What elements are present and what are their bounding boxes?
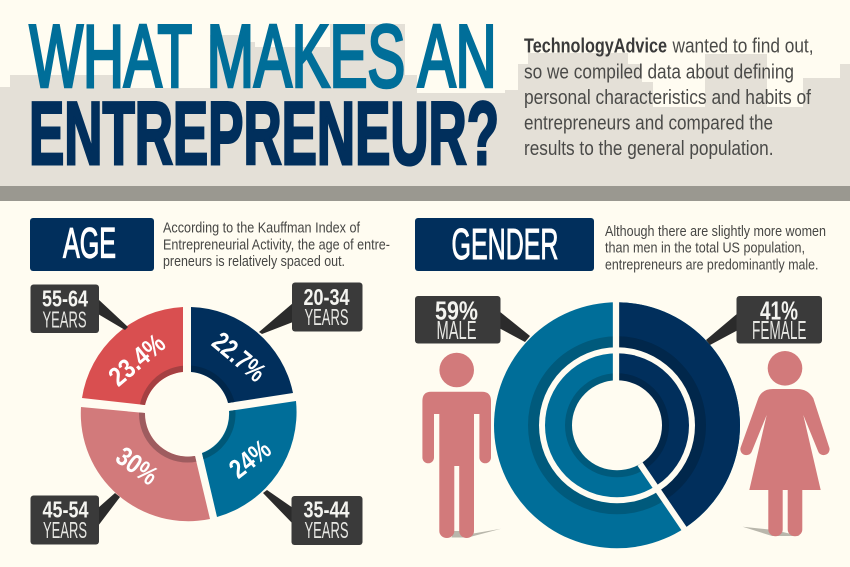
- gender donut chart: [494, 298, 740, 548]
- gender description: [605, 224, 826, 274]
- slice: 35-44 years 24%: 24%: [223, 434, 277, 484]
- gender heading: GENDER: [452, 220, 558, 269]
- slice: 45-54 years 30%: [80, 407, 210, 522]
- callout: 55-64 years: 55-64: [42, 286, 88, 312]
- slice: 45-54 years 30%: 30%: [110, 441, 164, 491]
- female ring 41%: [619, 302, 740, 527]
- gender heading: [415, 218, 594, 271]
- age heading: [30, 218, 154, 271]
- age heading: AGE: [63, 220, 116, 268]
- icon: male figure: [422, 353, 501, 538]
- callout: 41% female: [706, 296, 822, 345]
- intro text block: [524, 35, 814, 160]
- intro text block: wanted to find out,: [672, 35, 814, 57]
- age description: According to the Kauffman Index of: [163, 221, 361, 237]
- intro text block: personal characteristics and habits of: [524, 87, 811, 109]
- callout: 20-34 years: [259, 282, 362, 334]
- callout: 55-64 years: [30, 284, 128, 333]
- callout: 35-44 years: YEARS: [304, 517, 348, 543]
- title: ENTREPRENEUR?: [29, 83, 499, 183]
- header skyline background: [0, 24, 850, 201]
- panel: age: [30, 218, 390, 545]
- panel: gender: [415, 218, 830, 548]
- slice: 55-64 years 23.4%: [82, 307, 183, 405]
- callout: 59% male: MALE: [436, 317, 476, 345]
- callout: 59% male: [415, 296, 530, 345]
- intro text block: results to the general population.: [524, 138, 774, 160]
- callout: 45-54 years: [30, 493, 120, 544]
- age description: preneurs is relatively spaced out.: [163, 254, 345, 270]
- intro text block: entrepreneurs and compared the: [524, 112, 773, 134]
- slice: 20-34 years 22.7%: 22.7%: [206, 326, 272, 388]
- callout: 20-34 years: 20-34: [304, 284, 350, 310]
- age description: Entrepreneurial Activity, the age of entre-: [163, 237, 390, 253]
- callout: 41% female: 41%: [760, 297, 798, 325]
- age donut chart: [81, 307, 297, 521]
- age description: [163, 221, 390, 270]
- callout: 45-54 years: 45-54: [42, 496, 89, 522]
- callout: 59% male: 59%: [435, 297, 478, 325]
- intro text block: so we compiled data about defining: [524, 61, 794, 83]
- male ring 59%: [494, 302, 740, 548]
- callout: 45-54 years: YEARS: [43, 517, 87, 543]
- slice: 55-64 years 23.4%: 23.4%: [103, 328, 171, 392]
- callout: 35-44 years: [263, 490, 362, 545]
- slice: 20-34 years 22.7%: [191, 307, 293, 403]
- title: [29, 7, 499, 183]
- callout: 20-34 years: YEARS: [304, 304, 348, 330]
- intro text block: TechnologyAdvice: [524, 35, 667, 57]
- gender description: entrepreneurs are predominantly male.: [605, 258, 818, 274]
- icon: female figure: [740, 351, 830, 536]
- gender description: than men in the total US population,: [605, 241, 805, 257]
- title: WHAT MAKES AN: [30, 7, 496, 106]
- callout: 35-44 years: 35-44: [304, 496, 350, 522]
- slice: 35-44 years 24%: [202, 401, 297, 517]
- callout: 55-64 years: YEARS: [42, 306, 86, 332]
